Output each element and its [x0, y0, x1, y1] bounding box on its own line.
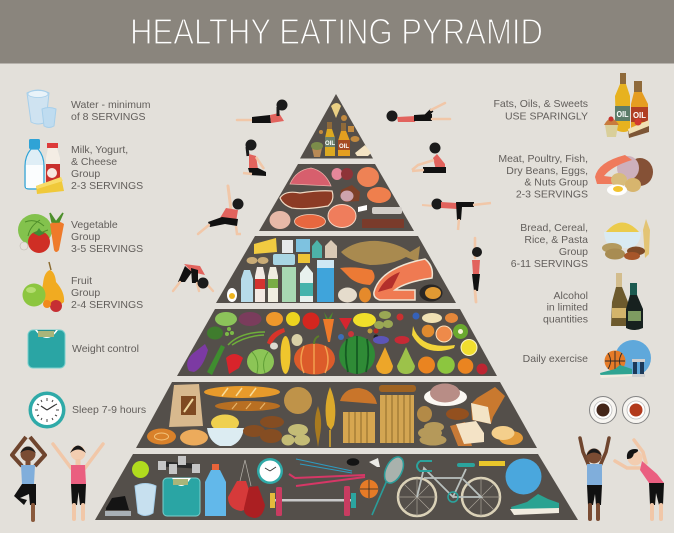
left text: milk: 2-3 SERVINGS — [71, 180, 143, 192]
left text: vegetable: Group — [71, 231, 100, 243]
cherry — [476, 364, 488, 374]
carton blue — [317, 260, 334, 302]
pink steak — [290, 168, 331, 186]
icon: meat group — [595, 155, 653, 196]
chili — [267, 328, 285, 345]
ruler — [479, 461, 505, 466]
apricot half — [422, 325, 434, 337]
barbell — [270, 486, 356, 516]
icon: cabbage, tomato, carrot — [18, 213, 64, 253]
figure: kneeling pose — [243, 140, 266, 176]
glass — [135, 484, 156, 516]
figure: tree pose woman — [12, 437, 45, 520]
left text: fruit: Group — [71, 287, 100, 299]
puck — [347, 458, 359, 466]
tier 6: exercise equipment — [105, 454, 559, 518]
skate — [105, 496, 131, 516]
flour bag — [169, 384, 203, 427]
left text: water: of 8 SERVINGS — [71, 111, 146, 123]
tomato — [302, 312, 320, 330]
small cartons — [312, 240, 337, 258]
large wheat — [326, 387, 335, 447]
icon: coffee cups — [590, 396, 650, 424]
salmon steak — [374, 259, 432, 300]
figure: arms up woman right — [580, 438, 609, 519]
icon: fruit group — [22, 262, 64, 312]
corn — [280, 336, 290, 374]
icon: exercise gear — [600, 340, 651, 378]
salami — [372, 207, 402, 214]
right text: alcohol: quantities — [543, 313, 588, 325]
figure: woman arms raised — [53, 444, 103, 519]
spiral bun — [147, 428, 176, 444]
pumpkin — [294, 336, 335, 374]
icon: alcohol bottles — [611, 273, 643, 330]
cupcake — [311, 142, 323, 157]
red pepper — [226, 354, 243, 374]
oil bottle A: OIL — [325, 141, 335, 147]
small loaf — [446, 408, 469, 420]
figure: balance pose — [422, 198, 491, 230]
left text: milk: & Cheese — [71, 156, 117, 168]
right text: bread: 6-11 SERVINGS — [511, 258, 588, 270]
yogurt cups — [282, 239, 310, 253]
orange pear — [376, 347, 393, 374]
left text: sleep: Sleep 7-9 hours — [72, 404, 146, 416]
carton green — [282, 267, 296, 302]
left text: milk: Milk, Yogurt, — [71, 144, 128, 156]
eggplant — [187, 344, 208, 372]
packaged butter — [273, 254, 295, 265]
salmon pile — [357, 167, 379, 187]
ham with bone — [328, 204, 367, 228]
icon: water glasses — [27, 90, 56, 128]
purple leaf — [238, 312, 262, 326]
grapes — [373, 336, 410, 344]
figure: seated forward bend — [412, 142, 446, 173]
figure: downward dog — [173, 264, 213, 291]
left text: water: Water - minimum — [71, 99, 151, 111]
oil bottle B: OIL — [339, 144, 349, 150]
fish — [341, 241, 420, 265]
tier 5: grains — [147, 384, 523, 447]
orange chops — [367, 187, 391, 203]
kiwi — [453, 324, 468, 339]
left text: vegetable: Vegetable — [71, 219, 118, 231]
baguette two — [215, 401, 280, 411]
small sweets — [319, 115, 360, 142]
tier 1: fats and sweets — [311, 103, 371, 157]
tennis ball — [132, 461, 149, 478]
watermelon — [339, 336, 375, 374]
macaroni — [417, 406, 432, 422]
bread slices — [450, 421, 484, 446]
water bottle — [205, 464, 226, 516]
right text: fats: USE SPARINGLY — [505, 110, 588, 122]
grapefruit slice — [436, 326, 452, 342]
header band — [0, 0, 674, 64]
shuttlecock — [369, 458, 380, 467]
clam — [359, 288, 371, 302]
plate of meat — [424, 384, 467, 406]
left text: fruit: 2-4 SERVINGS — [71, 299, 143, 311]
dark bread — [243, 416, 284, 443]
right text: bread: Rice, & Pasta — [524, 234, 588, 246]
white loaf — [471, 387, 505, 424]
scale — [163, 478, 200, 516]
title: HEALTHY EATING PYRAMID — [130, 11, 543, 52]
cabbage — [247, 349, 274, 374]
ham — [280, 191, 333, 209]
exercise ball — [506, 458, 542, 494]
left text: vegetable: 3-5 SERVINGS — [71, 243, 143, 255]
cake slice — [355, 145, 371, 156]
green pear — [397, 347, 415, 374]
shell — [338, 288, 357, 302]
sausages — [332, 168, 353, 180]
icon: weight scale — [28, 330, 65, 368]
meat chunk — [340, 185, 360, 202]
sneaker — [510, 494, 559, 515]
left text: weight control: Weight control — [72, 343, 139, 355]
yellow pepper — [286, 312, 300, 326]
potatoes — [282, 424, 310, 446]
lemon — [353, 313, 376, 327]
mash bowl — [207, 414, 244, 446]
bacon round — [270, 211, 290, 229]
icon: oil bottles and sweets — [604, 73, 649, 138]
right text: meat: Meat, Poultry, Fish, — [498, 153, 588, 165]
chocolate sausage — [362, 219, 404, 228]
egg — [227, 288, 237, 302]
right text: alcohol: in limited — [547, 302, 588, 314]
figure: side bend woman right — [615, 440, 664, 519]
steak oval — [294, 214, 326, 228]
boxing gloves — [228, 460, 265, 518]
tier 3: dairy and fish — [227, 238, 442, 302]
banana — [412, 326, 455, 351]
right text: meat: & Nuts Group — [524, 177, 588, 189]
bicycle — [398, 461, 500, 516]
right text: bread: Bread, Cereal, — [520, 222, 588, 234]
fusilli — [284, 387, 312, 414]
tangerine — [458, 358, 473, 374]
right text: fats: Fats, Oils, & Sweets — [493, 98, 588, 110]
teal ski poles — [296, 459, 352, 473]
figure: locust pose — [386, 103, 450, 122]
spaghetti top — [379, 385, 416, 392]
round buns — [492, 426, 523, 445]
penne — [343, 412, 375, 443]
figure: standing arm up — [472, 238, 482, 302]
eggs pair — [246, 257, 268, 264]
clock — [257, 458, 283, 484]
figure: cobra pose — [237, 100, 288, 123]
icon: bread group — [602, 219, 650, 260]
pyramid tiers — [95, 94, 578, 520]
orange — [418, 356, 435, 374]
right text: meat: 2-3 SERVINGS — [516, 188, 588, 200]
shrimp — [340, 267, 375, 285]
figure: warrior pose — [198, 186, 244, 234]
tier 4: vegetables and fruit — [187, 311, 487, 375]
peach — [445, 313, 458, 323]
right text: alcohol: Alcohol — [554, 290, 588, 302]
icon: oil bottles and sweets: OIL — [633, 111, 646, 120]
lettuce — [215, 312, 237, 326]
baguette — [204, 386, 280, 398]
oval bread — [180, 430, 208, 446]
orange pepper — [266, 312, 283, 326]
right text: meat: Dry Beans, Eggs, — [506, 165, 588, 177]
apple — [437, 356, 455, 374]
left text: milk: Group — [71, 168, 100, 180]
racket — [372, 454, 407, 515]
bottle red label — [255, 267, 265, 302]
small wheat — [315, 406, 321, 447]
pink skis — [289, 474, 365, 486]
bottle green band — [268, 279, 278, 288]
right text: daily exercise: Daily exercise — [523, 353, 588, 365]
carrot — [323, 312, 334, 342]
ice cream — [331, 103, 341, 118]
garlic onion — [270, 334, 302, 350]
green onion — [228, 332, 265, 345]
dumbbell — [158, 456, 200, 474]
basketball — [360, 480, 378, 498]
icon: oil bottles and sweets: OIL — [616, 110, 629, 119]
tier 2: meat — [270, 167, 404, 229]
cheese wedge — [254, 238, 277, 254]
berries — [338, 312, 420, 340]
crackers — [418, 422, 446, 446]
bottle light blue — [241, 270, 253, 302]
bananas — [422, 313, 442, 323]
lemon slice — [461, 340, 477, 356]
butter — [298, 254, 310, 263]
mussel — [420, 284, 442, 302]
cucumber — [207, 345, 225, 375]
bread loaf — [340, 388, 377, 404]
right text: bread: Group — [559, 246, 588, 258]
icon: milk bottle, yogurt, cheese — [25, 139, 64, 194]
olives — [374, 311, 393, 329]
bottle green label — [268, 267, 278, 302]
strawberry — [339, 318, 352, 330]
peas — [225, 327, 234, 336]
spaghetti — [380, 395, 414, 443]
left text: fruit: Fruit — [71, 275, 92, 287]
herbs — [207, 326, 223, 340]
bottle red band — [255, 279, 265, 289]
carton white teal — [300, 265, 313, 302]
icon: clock — [28, 392, 66, 428]
